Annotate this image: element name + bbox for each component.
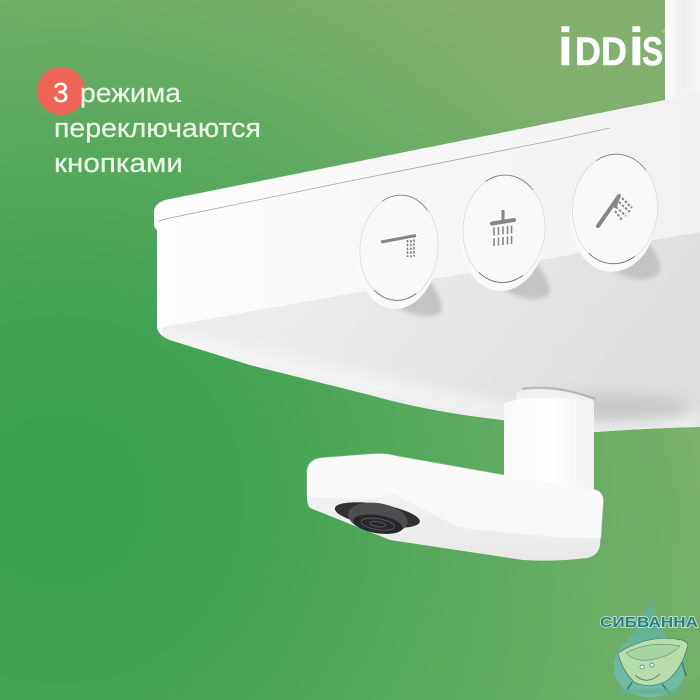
button: overhead rail shower <box>353 192 442 312</box>
sibvanna dealer logo <box>600 597 699 697</box>
heading text: кнопками <box>54 148 183 178</box>
heading text: 3 <box>53 77 69 108</box>
cylinder stem <box>504 398 594 492</box>
iddis brand logo: S <box>642 30 663 74</box>
bathtub <box>618 638 688 686</box>
water drop <box>614 597 685 697</box>
shower pole <box>665 0 700 105</box>
button: rain shower <box>457 172 549 294</box>
heading text <box>53 77 261 178</box>
heading text: режима <box>80 78 181 108</box>
brand name: СИБВАННА <box>600 615 699 631</box>
spout top face <box>307 454 603 538</box>
iddis brand logo: DD <box>575 30 627 74</box>
panel underside <box>150 232 700 440</box>
iddis brand logo <box>558 18 665 77</box>
icon: hand shower <box>598 195 632 226</box>
spout arm <box>307 454 603 561</box>
faucet spout <box>307 388 603 561</box>
icon: rain shower <box>492 210 514 246</box>
iddis brand logo: i <box>629 18 644 77</box>
shower panel body <box>150 92 700 440</box>
heading text: переключаются <box>54 113 261 143</box>
collar <box>516 388 594 412</box>
smile face <box>635 663 660 680</box>
icon: rail shower <box>381 236 416 257</box>
shadow: collar <box>522 388 595 399</box>
button: hand shower <box>567 151 661 275</box>
bathtub legs <box>627 662 686 694</box>
aerator <box>332 496 422 540</box>
rim seam <box>158 128 610 222</box>
iddis brand logo: i <box>558 18 573 77</box>
tagline strip <box>620 689 680 694</box>
shadow: button shadows <box>398 240 660 316</box>
bathtub inner <box>626 644 680 660</box>
panel outline <box>154 92 700 432</box>
coral circle accent <box>37 67 85 115</box>
